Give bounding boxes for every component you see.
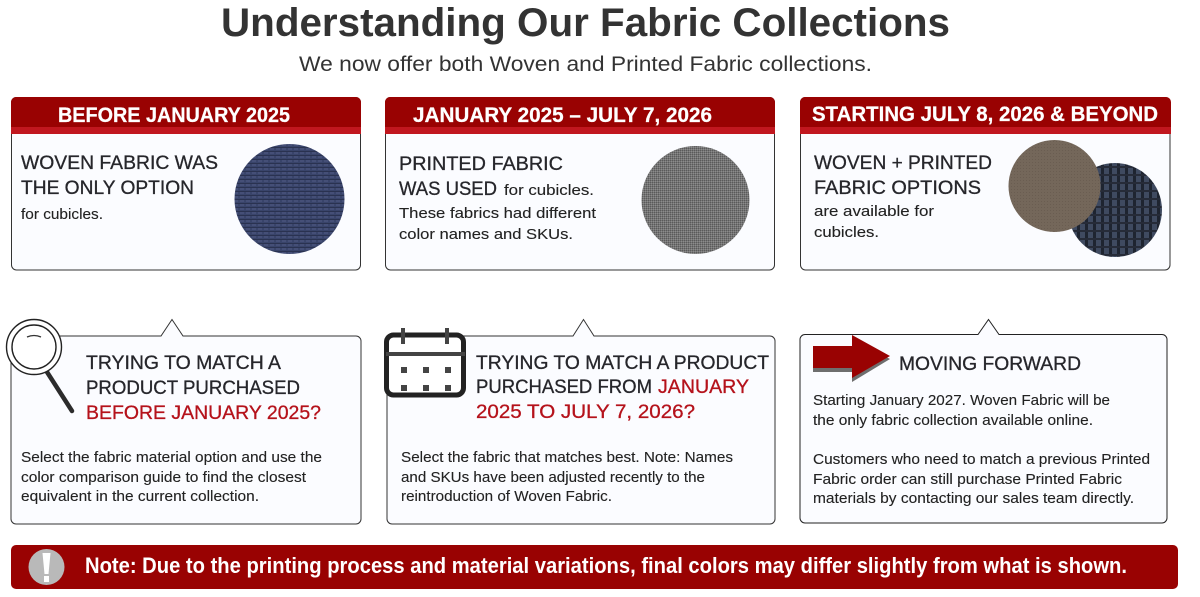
panel: before January 2025: [11, 97, 361, 270]
text: select fabric material: color comparison guide to find the closest: [21, 469, 307, 486]
heading: January 2025 to July 2026 question: TRYING TO MATCH A PRODUCT: [476, 353, 769, 374]
heading: January 2025 to July 2026 question: PURCHASED FROM: [476, 377, 652, 398]
text: woven and printed options: [814, 153, 992, 241]
icon: magnifying glass: [6, 320, 72, 411]
icon: calendar: [386, 328, 465, 395]
text: select fabric material: Select the fabric material option and use the: [21, 449, 322, 466]
text: woven fabric only: THE ONLY OPTION: [21, 178, 194, 199]
text: moving forward details: materials by contacting our sales team directly.: [813, 490, 1134, 507]
text: printed fabric used: These fabrics had different: [399, 205, 597, 222]
text: woven fabric only: for cubicles.: [21, 206, 103, 223]
text: printed fabric used: for cubicles.: [504, 182, 594, 199]
panel header: starting July 8 2026: [800, 97, 1171, 134]
text: woven and printed options: cubicles.: [814, 224, 879, 241]
text: moving forward details: the only fabric collection available online.: [813, 412, 1093, 429]
icon: red arrow: [813, 335, 890, 382]
text: moving forward details: Customers who need to match a previous Printed: [813, 451, 1150, 468]
note banner: [11, 545, 1178, 589]
text: select fabric material: [21, 449, 322, 505]
heading: before January 2025 question: BEFORE JANUARY 2025?: [86, 403, 321, 424]
panel header: before January 2025: [11, 97, 361, 134]
text: woven fabric only: [21, 153, 218, 223]
text: moving forward details: [813, 392, 1150, 507]
text: select best match: [401, 449, 733, 505]
subtitle: We now offer both Woven and Printed Fabric collections.: [299, 53, 872, 76]
text: printed fabric used: PRINTED FABRIC: [399, 154, 563, 175]
heading: before January 2025 question: TRYING TO MATCH A: [86, 353, 281, 374]
panel header: January 2025 to July 7 2026: JANUARY 2025 – JULY 7, 2026: [413, 104, 712, 127]
panel: match product from January 2025 to July 2026: [386, 320, 775, 524]
heading: January 2025 to July 2026 question: [476, 353, 769, 423]
heading: January 2025 to July 2026 question: 2025 TO JULY 7, 2026?: [476, 402, 695, 423]
heading: moving forward: MOVING FORWARD: [899, 354, 1081, 375]
icon: woven blue fabric swatch: [234, 144, 344, 254]
panel: starting July 8 2026 and beyond: [800, 97, 1171, 270]
heading: before January 2025 question: PRODUCT PURCHASED: [86, 378, 300, 399]
panel: match product before January 2025: [6, 320, 361, 524]
text: select best match: Select the fabric that matches best. Note: Names: [401, 449, 733, 466]
panel: January 2025 to July 7 2026: [385, 97, 775, 270]
icon: printed gray fabric swatch: [642, 146, 750, 254]
icon: overlapping fabric swatches: [1008, 140, 1162, 257]
text: printed fabric used: color names and SKUs.: [399, 226, 573, 243]
panel header: January 2025 to July 7 2026: [385, 97, 775, 134]
heading: before January 2025 question: [86, 353, 321, 424]
text: printed fabric used: [399, 154, 597, 243]
text: woven and printed options: WOVEN + PRINTED: [814, 153, 992, 174]
text: select fabric material: equivalent in the current collection.: [21, 488, 259, 505]
note text: Note: Due to the printing process and material variations, final colors may differ slightly from what is shown.: [85, 553, 1127, 578]
heading: January 2025 to July 2026 question: JANUARY: [658, 377, 749, 398]
text: select best match: and SKUs have been adjusted recently to the: [401, 469, 705, 486]
panel header: starting July 8 2026: STARTING JULY 8, 2026 & BEYOND: [812, 103, 1158, 126]
panel: moving forward: [800, 320, 1167, 523]
icon: exclamation mark: [28, 549, 64, 585]
text: woven and printed options: FABRIC OPTIONS: [814, 178, 981, 199]
title: Understanding Our Fabric Collections: [221, 1, 950, 45]
text: woven fabric only: WOVEN FABRIC WAS: [21, 153, 218, 174]
text: moving forward details: Fabric order can still purchase Printed Fabric: [813, 471, 1123, 488]
text: select best match: reintroduction of Woven Fabric.: [401, 488, 612, 505]
text: printed fabric used: WAS USED: [399, 179, 497, 200]
panel header: before January 2025: BEFORE JANUARY 2025: [58, 104, 290, 127]
text: woven and printed options: are available for: [814, 203, 934, 220]
text: moving forward details: Starting January 2027. Woven Fabric will be: [813, 392, 1110, 409]
